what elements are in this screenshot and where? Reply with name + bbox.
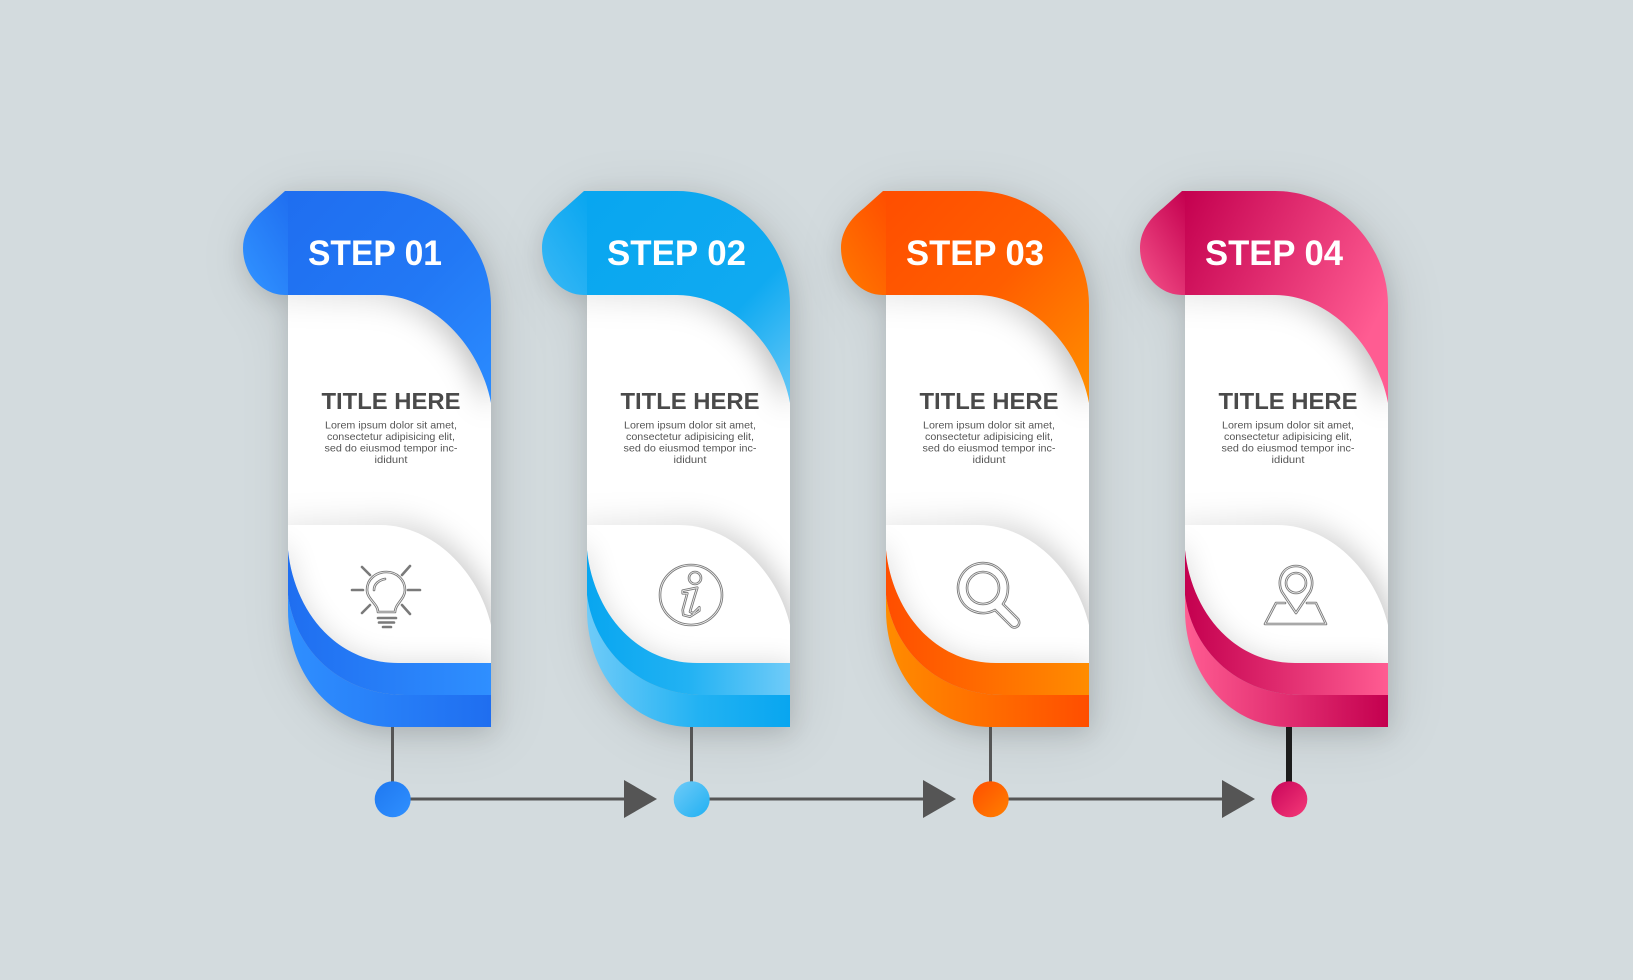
outer bottom band: [587, 595, 790, 727]
description: consectetur adipisicing elit,: [1224, 431, 1352, 443]
step tab: [841, 191, 886, 295]
step label: STEP 04: [1205, 234, 1344, 273]
icon: info: [660, 565, 722, 625]
panel: step 04: [1140, 177, 1419, 735]
description: consectetur adipisicing elit,: [626, 431, 754, 443]
connector 2: [690, 727, 693, 787]
description: Lorem ipsum dolor sit amet,: [923, 420, 1055, 432]
description: Lorem ipsum dolor sit amet,: [624, 420, 756, 432]
step header curve: [587, 191, 790, 403]
node 3: [973, 781, 1009, 817]
inner bottom band: [1185, 550, 1388, 695]
node 4: [1271, 781, 1307, 817]
step label: STEP 01: [308, 234, 442, 273]
step label: STEP 03: [906, 234, 1044, 273]
connector 1: [391, 727, 394, 787]
description: Lorem ipsum dolor sit amet,: [1222, 420, 1354, 432]
inner bottom band: [886, 550, 1089, 695]
title: TITLE HERE: [1218, 388, 1358, 414]
outer bottom band: [1185, 595, 1388, 727]
icon: light bulb: [352, 566, 420, 627]
panel: step 03: [841, 177, 1120, 735]
panel: step 02: [542, 177, 821, 735]
inner bottom band: [587, 550, 790, 695]
description: sed do eiusmod tempor inc-: [1222, 442, 1355, 454]
connector 4: [1286, 727, 1292, 787]
description: [624, 420, 757, 466]
title: TITLE HERE: [920, 388, 1058, 414]
description: [324, 420, 458, 466]
description: Lorem ipsum dolor sit amet,: [325, 420, 457, 432]
description: sed do eiusmod tempor inc-: [324, 442, 458, 454]
description: sed do eiusmod tempor inc-: [624, 442, 757, 454]
arrow 1: [405, 780, 657, 818]
step label: STEP 02: [607, 234, 746, 273]
description: [1222, 420, 1355, 466]
outer bottom band: [886, 595, 1089, 727]
icon: map pin: [1265, 566, 1326, 624]
title: TITLE HERE: [322, 388, 460, 414]
description: consectetur adipisicing elit,: [925, 431, 1053, 443]
connector 3: [989, 727, 992, 787]
description: consectetur adipisicing elit,: [327, 431, 455, 443]
inner bottom band: [288, 550, 491, 695]
step header curve: [1185, 191, 1388, 403]
step tab: [542, 191, 587, 295]
node 1: [375, 781, 411, 817]
step tab: [1140, 191, 1185, 295]
description: ididunt: [972, 454, 1006, 466]
panel: step 01: [243, 177, 522, 735]
arrow 3: [1003, 780, 1255, 818]
description: ididunt: [1272, 454, 1305, 466]
description: sed do eiusmod tempor inc-: [922, 442, 1056, 454]
step tab: [243, 191, 288, 295]
title: TITLE HERE: [620, 388, 760, 414]
step header curve: [288, 191, 491, 403]
arrow 2: [704, 780, 956, 818]
description: [922, 420, 1056, 466]
step header curve: [886, 191, 1089, 403]
icon: magnifier: [958, 563, 1019, 627]
node 2: [674, 781, 710, 817]
description: ididunt: [374, 454, 408, 466]
description: ididunt: [674, 454, 707, 466]
outer bottom band: [288, 595, 491, 727]
